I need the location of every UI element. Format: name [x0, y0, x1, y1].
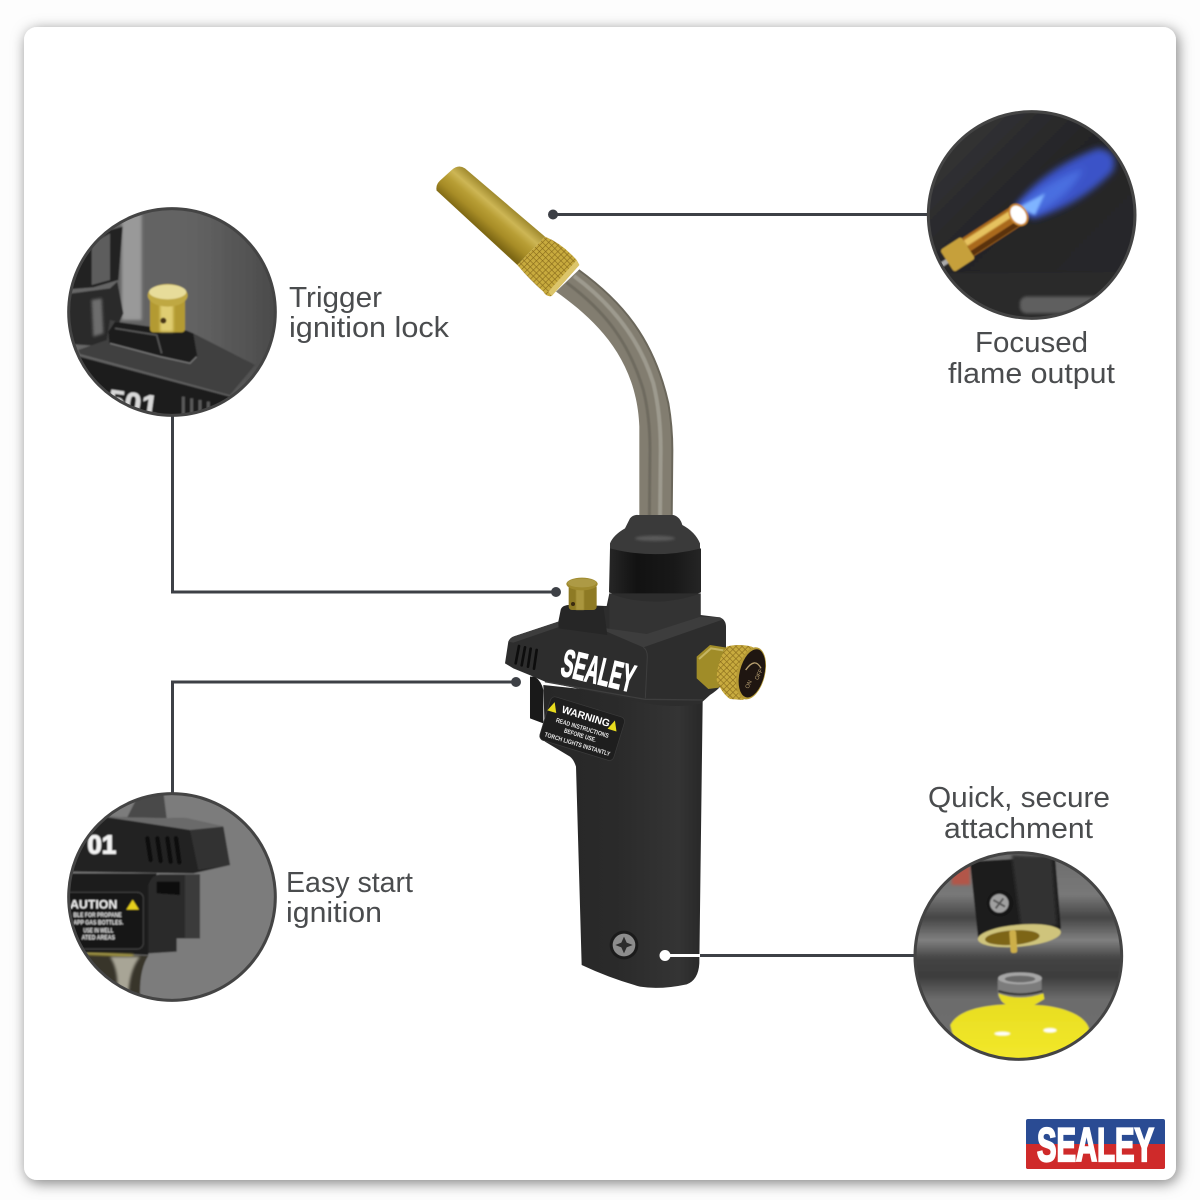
label: easy start ignition — [286, 867, 413, 929]
torch collar nut — [609, 515, 701, 601]
leader line: easy start ignition — [172, 677, 521, 795]
label: quick secure attachment: Quick, secure — [928, 782, 1110, 814]
mounting screw — [610, 931, 638, 959]
torch brass nozzle and knurled collar — [436, 167, 579, 296]
label: quick secure attachment — [928, 782, 1110, 845]
leader line: trigger ignition lock — [172, 415, 561, 597]
leader line: quick attachment — [660, 950, 916, 961]
circle detail: easy start ignition: APP GAS BOTTLES. — [73, 919, 124, 926]
circle detail: easy start ignition: USE IN WELL — [83, 927, 113, 934]
gas port cylinder — [970, 855, 1062, 953]
circle detail: easy start ignition: 01 — [87, 830, 116, 860]
label: focused flame output — [948, 327, 1115, 390]
warning label: WARNING — [560, 705, 611, 730]
warning label — [539, 696, 626, 762]
circle detail: easy start ignition: ATED AREAS — [82, 935, 115, 942]
circle detail: trigger ignition lock — [67, 207, 277, 417]
label: trigger ignition lock: Trigger — [289, 282, 382, 314]
leader line: flame output — [548, 210, 928, 220]
warning label: TORCH LIGHTS INSTANTLY — [544, 731, 612, 758]
gas cylinder neck — [998, 972, 1042, 998]
label: focused flame output: Focused — [975, 327, 1088, 359]
label: trigger ignition lock: ignition lock — [289, 312, 450, 344]
circle detail: quick attachment — [914, 851, 1124, 1061]
circle detail: easy start ignition: AUTION — [70, 897, 117, 911]
gas control knob: ON — [745, 680, 754, 690]
yellow gas cylinder — [950, 992, 1090, 1058]
label: focused flame output: flame output — [948, 358, 1115, 390]
label: easy start ignition: Easy start — [286, 867, 413, 899]
torch product illustration — [436, 167, 771, 988]
label: easy start ignition: ignition — [286, 897, 382, 929]
flame — [1015, 148, 1115, 219]
circle detail: trigger ignition lock: 501 — [106, 384, 160, 424]
torch body and handle — [505, 578, 726, 988]
gas control knob: OFF — [754, 668, 765, 681]
warning label: READ INSTRUCTIONS — [555, 717, 610, 740]
trigger — [530, 677, 543, 723]
circle detail: easy start ignition — [67, 792, 277, 1002]
circle detail: focused flame — [926, 110, 1136, 320]
vent slots — [516, 646, 537, 669]
gas control knob — [697, 644, 771, 703]
torch bent metal tube — [556, 270, 672, 522]
circle detail: easy start ignition: BLE FOR PROPANE — [73, 912, 122, 919]
ignition lock pin — [558, 578, 607, 635]
SEALEY brand on casing: SEALEY — [557, 642, 639, 701]
torch head casing — [505, 593, 726, 706]
label: trigger ignition lock — [289, 282, 450, 344]
warning label: BEFORE USE. — [563, 728, 597, 744]
nozzle — [940, 202, 1030, 272]
label: quick secure attachment: attachment — [944, 813, 1093, 845]
